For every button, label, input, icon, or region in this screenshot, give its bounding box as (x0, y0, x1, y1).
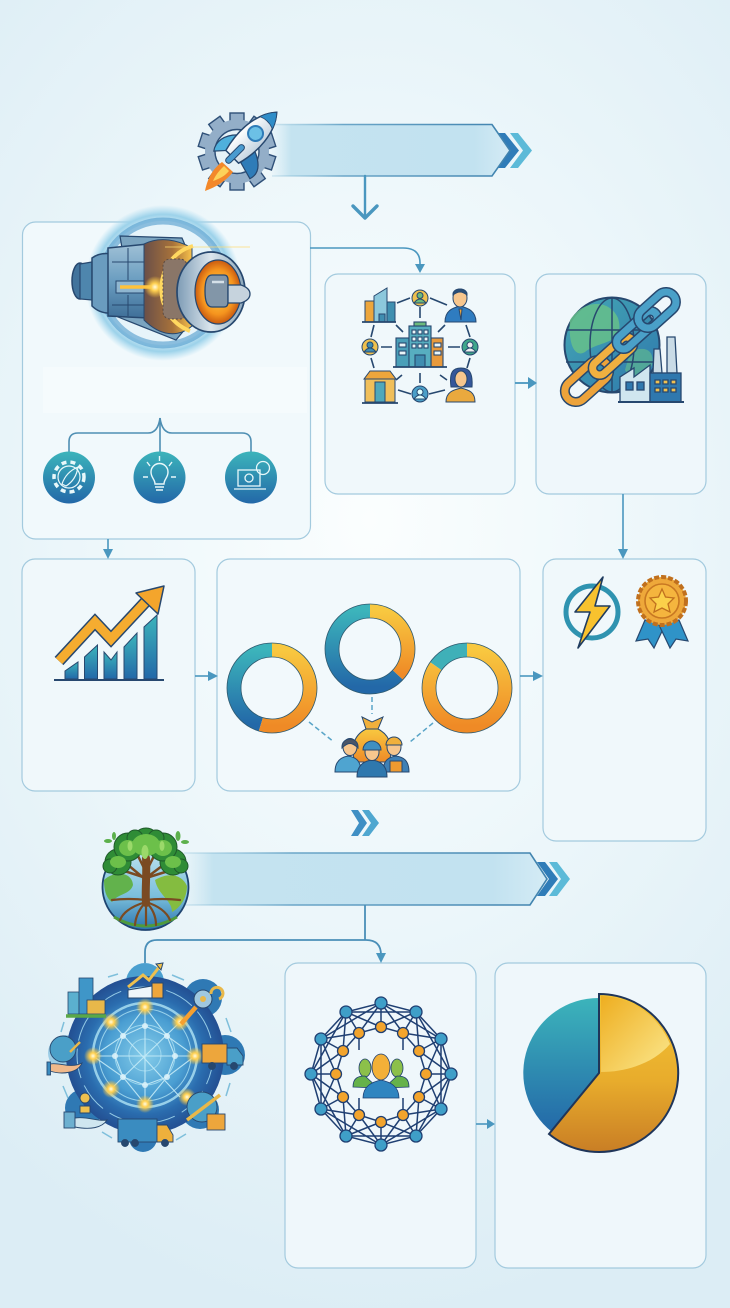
icon: globe chain and factory (560, 288, 684, 407)
person man (445, 289, 476, 322)
connector: three-way branch (69, 418, 251, 452)
arrow: donuts to energy (520, 671, 543, 681)
icon: light bulb badge (134, 452, 186, 504)
panel: engine overview (22, 222, 310, 539)
icon: growth bar chart with arrow (54, 586, 164, 680)
panel: people network (285, 963, 476, 1268)
icon: rocket and gear (198, 98, 297, 191)
chart: left donut (227, 643, 317, 733)
icon: money bag and workers (335, 717, 409, 777)
panel: energy and award (543, 559, 706, 841)
connector: dashed links to people (309, 697, 433, 742)
satellite: bottom container truck (118, 1119, 173, 1146)
city buildings top left (362, 288, 396, 322)
satellite: graph and factory (128, 963, 163, 998)
satellite: right truck (202, 1044, 243, 1070)
satellite: bottom left hand and person (64, 1093, 107, 1128)
connector: lower banner split (145, 905, 386, 963)
panel: pie chart (495, 963, 706, 1268)
panel: global supply chain (536, 274, 706, 494)
icon: people network graph (305, 997, 457, 1151)
arrow: people network to pie (476, 1119, 495, 1129)
icon: gear badge (43, 452, 95, 504)
icon: small double chevron (351, 810, 379, 836)
arrow: banner down to content (353, 176, 377, 218)
banner: lower heading ribbon (184, 853, 570, 905)
avatars (362, 290, 478, 402)
satellite: chain lock (181, 987, 223, 1024)
icon: network of companies and people (362, 288, 478, 403)
person woman (446, 368, 475, 402)
satellite: globe in hand (47, 1036, 82, 1075)
company building centre (393, 322, 447, 367)
icon: global logistics network (47, 963, 245, 1152)
chart: pie with gold wedge (523, 994, 678, 1152)
panel: network of companies (325, 274, 515, 494)
arrow: chart to donuts (195, 671, 218, 681)
arrow: chain panel down to energy panel (618, 494, 628, 559)
panel: three donut charts (217, 559, 520, 791)
chart: middle donut (325, 604, 415, 694)
chart: right donut (422, 643, 512, 733)
icon: glowing engine (72, 205, 250, 361)
satellite: city (66, 978, 106, 1016)
arrow: engine panel to companies panel (310, 248, 425, 273)
satellite: bottom right globe and box (187, 1092, 225, 1130)
house bottom left (362, 371, 398, 403)
banner: top heading ribbon (272, 124, 532, 176)
arrow: companies to supply chain (515, 377, 537, 389)
icon: laptop badge (225, 452, 277, 504)
icon: tree on globe (102, 828, 189, 930)
arrow: engine panel down to chart panel (103, 539, 113, 559)
panel: growth chart (22, 559, 195, 791)
icon: award medal (636, 577, 688, 648)
icon: lightning bolt with ring (566, 577, 618, 648)
